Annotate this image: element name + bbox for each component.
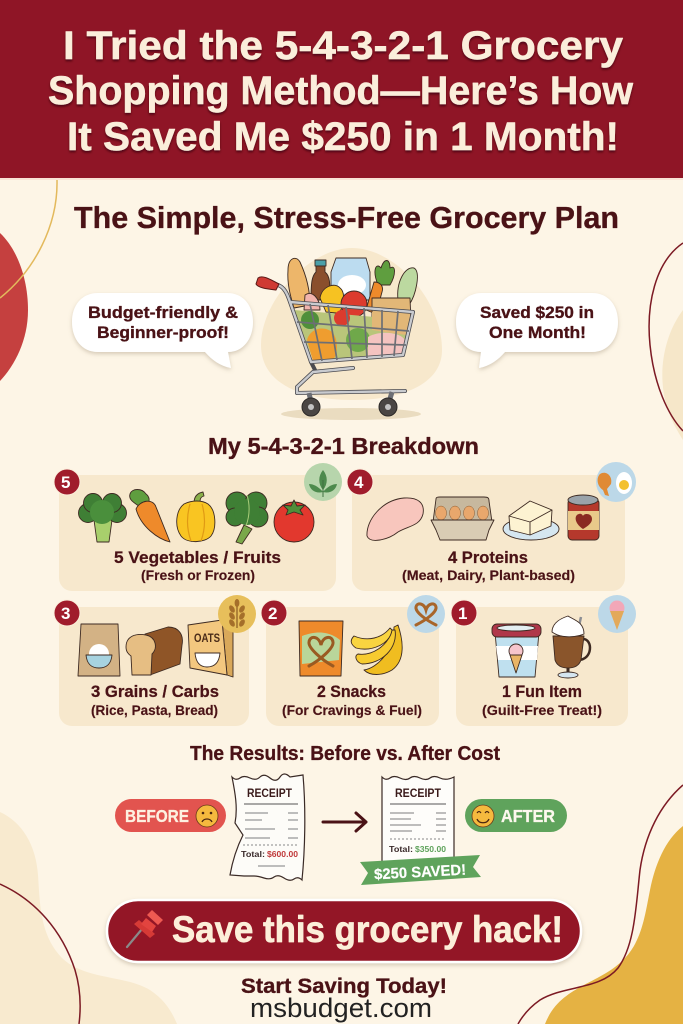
- label: 5 Vegetables / Fruits: [114, 548, 281, 567]
- badge 1: [451, 600, 477, 626]
- label: (Fresh or Frozen): [141, 568, 255, 583]
- icon: bananas: [351, 625, 402, 674]
- label: 4 Proteins: [448, 548, 528, 567]
- icon: pretzel chips bag: [299, 621, 343, 676]
- icon: chicken breast: [367, 498, 423, 540]
- icon: wheat circle: [218, 595, 256, 633]
- speech bubble: budget-friendly: Budget-friendly &: [88, 303, 238, 322]
- icon: hot cocoa mug: [552, 616, 590, 678]
- main title: [48, 24, 634, 159]
- badge 2: [261, 600, 287, 626]
- label: [91, 682, 219, 718]
- badge 5: [54, 469, 80, 495]
- header banner: [0, 0, 683, 180]
- icon: broccoli: [78, 494, 126, 542]
- icon: egg carton: [431, 497, 494, 540]
- badge 3: [54, 600, 80, 626]
- receipt: after: $350.00: [415, 844, 446, 854]
- label: [114, 548, 281, 583]
- receipt: before: [230, 774, 305, 880]
- icon: ice cream pint: [492, 624, 541, 677]
- receipt: before: $600.00: [267, 849, 298, 859]
- arrow: [323, 813, 366, 831]
- label: [282, 682, 422, 718]
- cart backdrop: [261, 248, 442, 400]
- icon: shopping cart full of groceries: [256, 248, 442, 420]
- call to action button: Save this grocery hack!: [172, 909, 563, 950]
- icon: spinach: [226, 492, 268, 544]
- call to action button: [107, 900, 581, 962]
- receipt: before: RECEIPT: [247, 788, 292, 800]
- footer call to action: Start Saving Today!: [241, 974, 447, 998]
- icon: push pin: [127, 910, 163, 947]
- icon: pretzel circle: [407, 595, 445, 633]
- panel: 2 snacks: [261, 595, 445, 726]
- icon: ice cream cone circle: [598, 595, 636, 633]
- after pill: [465, 799, 567, 832]
- cart frame: [278, 285, 413, 393]
- label: (Guilt-Free Treat!): [482, 703, 602, 718]
- icon: happy face: [472, 805, 494, 827]
- groceries: [288, 258, 417, 322]
- before pill: [115, 799, 226, 832]
- after pill: AFTER: [501, 806, 555, 826]
- badge 5: 5: [61, 473, 70, 492]
- badge 2: 2: [268, 604, 277, 623]
- receipt: after: Total:: [389, 844, 413, 854]
- icon: canned beans: [568, 495, 599, 540]
- subtitle: The Simple, Stress-Free Grocery Plan: [74, 201, 619, 235]
- website url: msbudget.com: [250, 993, 432, 1023]
- badge 1: 1: [458, 604, 467, 623]
- panel: 3 grains and carbs: [54, 595, 256, 726]
- icon: yellow pepper: [177, 492, 215, 542]
- section heading: breakdown: My 5-4-3-2-1 Breakdown: [208, 433, 479, 459]
- icon: carrot: [130, 490, 170, 542]
- icon: oats box: [188, 620, 233, 677]
- main title: It Saved Me $250 in 1 Month!: [67, 115, 619, 159]
- badge 3: 3: [61, 604, 70, 623]
- receipt: after: RECEIPT: [395, 788, 441, 800]
- icon: oats box: OATS: [194, 631, 220, 645]
- wheels: [302, 392, 397, 416]
- panel: 5 vegetables and fruits: [54, 463, 342, 591]
- cart handle: [256, 277, 279, 290]
- label: (Rice, Pasta, Bread): [91, 703, 218, 718]
- icon: tomato: [274, 500, 314, 542]
- before pill: BEFORE: [125, 806, 189, 826]
- main title: Shopping Method—Here’s How: [48, 69, 634, 113]
- speech bubble: budget-friendly: [72, 293, 253, 368]
- receipt: before: Total:: [241, 849, 265, 859]
- label: (Meat, Dairy, Plant-based): [402, 568, 575, 583]
- ribbon: 250 saved: $250 SAVED!: [374, 862, 467, 883]
- badge 4: 4: [354, 473, 364, 492]
- main title: I Tried the 5-4-3-2-1 Grocery: [63, 24, 624, 68]
- icon: leaf circle: [304, 463, 342, 501]
- speech bubble: saved: [456, 293, 618, 368]
- icon: sad face: [196, 805, 218, 827]
- speech bubble: saved: Saved $250 in: [480, 303, 594, 322]
- icon: rice bag: [78, 624, 120, 676]
- ribbon: 250 saved: [360, 855, 481, 885]
- label: (For Cravings & Fuel): [282, 703, 422, 718]
- label: 1 Fun Item: [502, 682, 582, 701]
- badge 4: [347, 469, 373, 495]
- receipt: after: [382, 776, 454, 862]
- icon: chicken and egg circle: [596, 462, 636, 502]
- section heading: results: The Results: Before vs. After Cost: [190, 742, 500, 765]
- speech bubble: saved: One Month!: [489, 323, 586, 342]
- label: 2 Snacks: [317, 682, 386, 701]
- label: 3 Grains / Carbs: [91, 682, 219, 701]
- icon: tofu on plate: [503, 501, 559, 540]
- label: [402, 548, 575, 583]
- label: [482, 682, 602, 718]
- icon: bread loaf: [126, 627, 182, 675]
- basket contents: [294, 310, 410, 360]
- panel: 1 fun item: [451, 595, 636, 726]
- speech bubble: budget-friendly: Beginner-proof!: [97, 323, 229, 342]
- panel: 4 proteins: [347, 462, 636, 591]
